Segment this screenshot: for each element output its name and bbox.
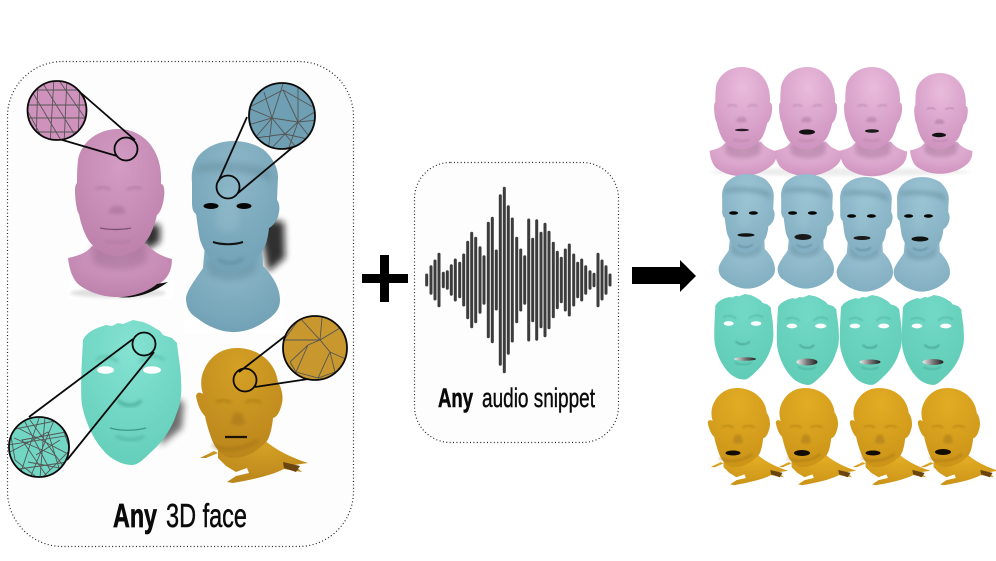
row: animated pink heads (710, 67, 972, 176)
icon: plus sign (362, 255, 408, 302)
row: animated gold heads (708, 388, 996, 485)
row: animated teal faces (714, 294, 964, 385)
heading: Any 3D face: 3D face (166, 497, 247, 534)
heading: Any 3D face (113, 497, 247, 534)
heading: Any audio snippet: Any (438, 383, 473, 413)
icon: blue 3D head with mesh zoom (184, 83, 318, 334)
arrow: output (632, 260, 696, 292)
panel: any audio snippet (414, 162, 618, 442)
icon: pink 3D head with mesh zoom (20, 78, 174, 299)
heading: Any audio snippet: audio snippet (482, 383, 595, 413)
panel: any 3D face (8, 62, 354, 546)
row: animated blue heads (719, 174, 950, 292)
heading: Any audio snippet (438, 383, 595, 413)
icon: teal 3D face with mesh zoom (8, 320, 184, 480)
chart: audio waveform (427, 188, 610, 372)
icon: gold 3D scan head with mesh zoom (196, 316, 348, 483)
heading: Any 3D face: Any (113, 497, 157, 534)
